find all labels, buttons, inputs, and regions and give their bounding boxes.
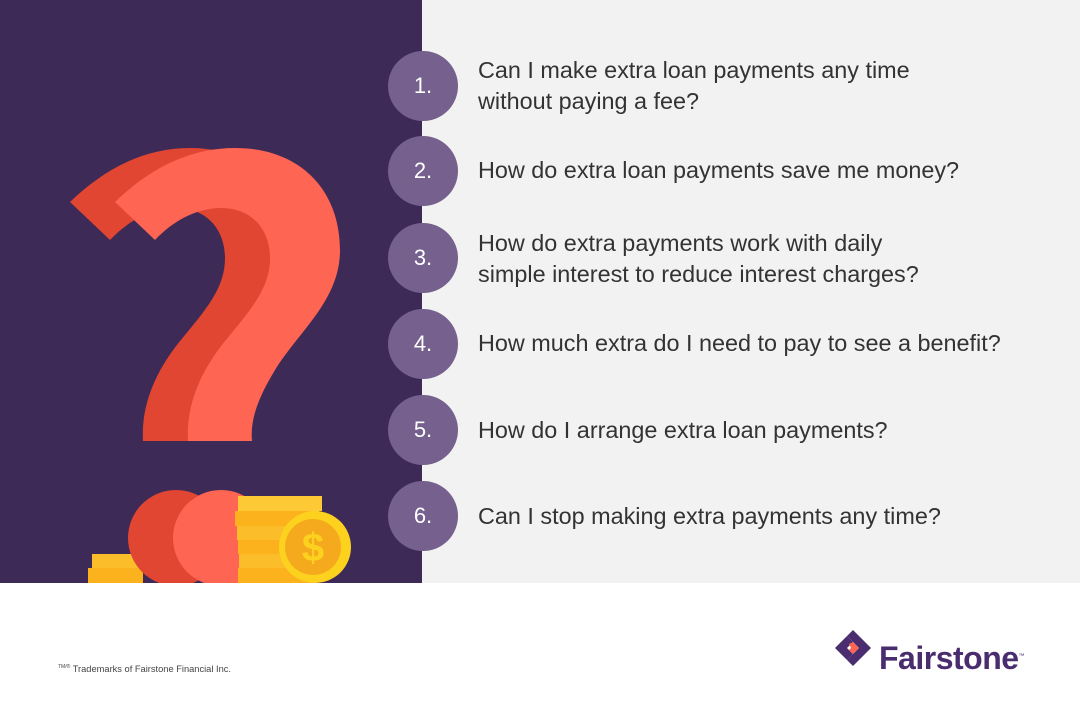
text: 2. [414,158,432,183]
text: 4. [414,331,432,356]
text: without paying a fee? [478,88,699,114]
text: How do I arrange extra loan payments? [478,417,888,443]
question 1 [388,51,910,121]
footer trademark note: TM/® Trademarks of Fairstone Financial Inc. [58,664,231,674]
text: 1. [414,73,432,98]
right background panel [422,0,1080,583]
text: 6. [414,503,432,528]
text: How do extra payments work with daily [478,230,882,256]
question 5 [388,395,888,465]
text: 3. [414,245,432,270]
left illustration panel [0,0,422,583]
text: Can I stop making extra payments any time? [478,503,941,529]
question 2 [388,136,959,206]
text: simple interest to reduce interest charges? [478,261,919,287]
icon: coins: $ [302,526,324,570]
question 3 [388,223,919,293]
icon: question mark [70,148,340,441]
text: 5. [414,417,432,442]
logo: Fairstone: Fairstone™ [879,640,1024,676]
text: Can I make extra loan payments any time [478,57,910,83]
icon: coins [88,490,351,586]
logo: Fairstone [835,630,1024,676]
question 6 [388,481,941,551]
text: How much extra do I need to pay to see a benefit? [478,330,1001,356]
text: How do extra loan payments save me money? [478,157,959,183]
question 4 [388,309,1001,379]
